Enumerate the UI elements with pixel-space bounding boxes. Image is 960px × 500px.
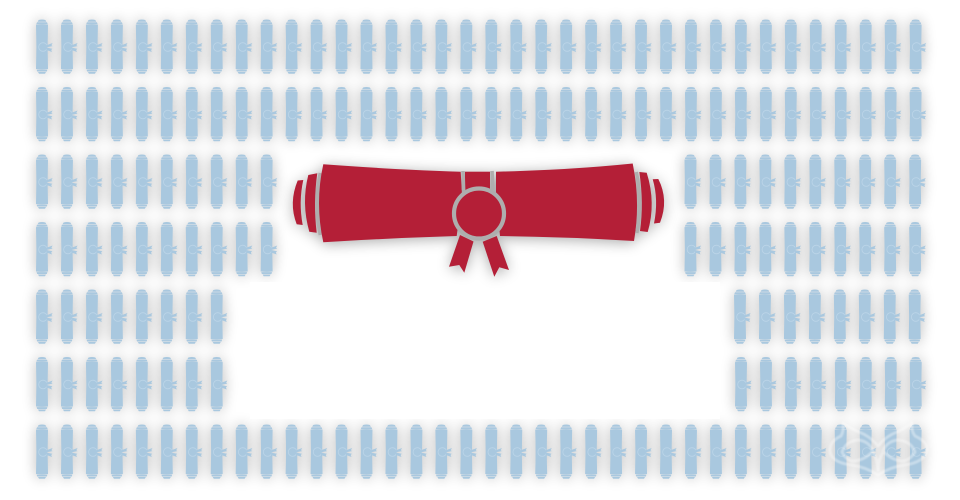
row 5 left scrolls xyxy=(36,290,227,344)
owl left eye xyxy=(842,440,873,461)
seal xyxy=(454,188,504,238)
grey left roll line xyxy=(317,173,320,235)
row 4 left scrolls xyxy=(36,222,277,276)
row 1 of scrolls xyxy=(36,20,926,74)
scroll left outer roll xyxy=(293,180,303,225)
grey right roll line xyxy=(636,172,639,233)
row 6 left scrolls xyxy=(36,357,227,411)
owl outer outline xyxy=(830,423,927,475)
owl right eye xyxy=(883,440,915,461)
row 4 right scrolls xyxy=(684,222,926,276)
scroll left body xyxy=(319,164,462,242)
row 3 right scrolls xyxy=(684,155,926,209)
owl watermark xyxy=(830,423,927,475)
scroll right outer roll xyxy=(653,179,664,224)
left ribbon tail xyxy=(449,235,474,273)
scroll right inner roll xyxy=(639,172,652,232)
row 7 of scrolls xyxy=(36,425,926,479)
icon: large red diploma scroll xyxy=(293,164,664,277)
scroll left inner roll xyxy=(305,173,317,233)
grey strap lines xyxy=(463,171,493,190)
scroll right body xyxy=(496,164,637,241)
blank centre area xyxy=(250,282,720,419)
row 3 left scrolls xyxy=(36,155,277,209)
row 6 right scrolls xyxy=(735,357,926,411)
row 5 right scrolls xyxy=(734,290,925,344)
row 2 of scrolls xyxy=(36,87,926,141)
center strap xyxy=(465,172,490,197)
owl beak xyxy=(874,454,882,470)
right ribbon tail xyxy=(483,236,509,277)
